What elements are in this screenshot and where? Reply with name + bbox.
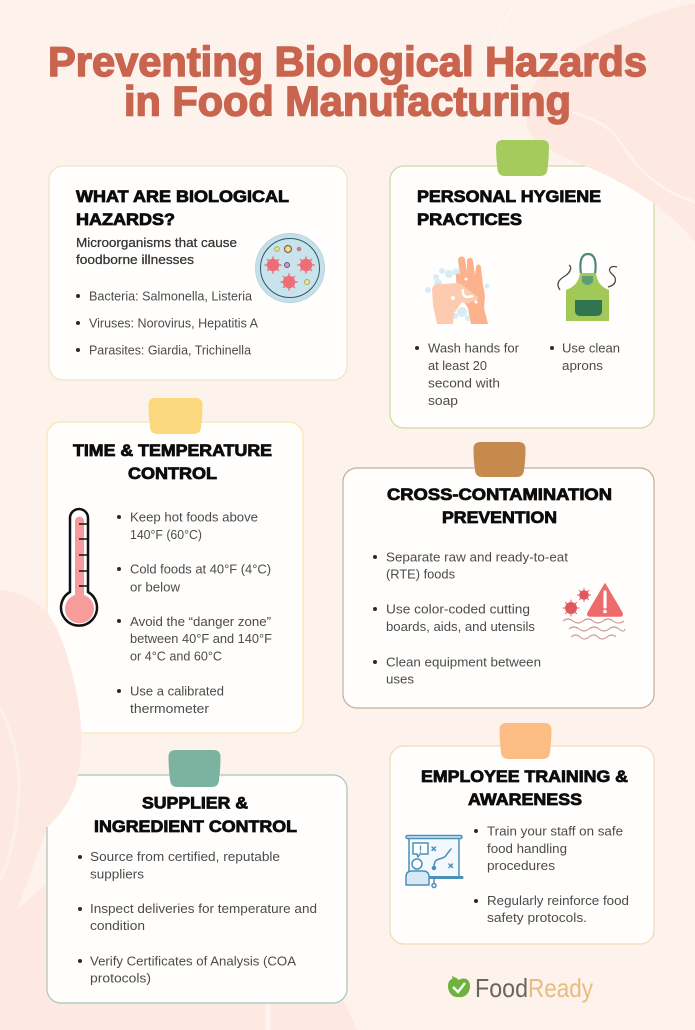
bullet list: Separate raw and ready-to-eat bbox=[386, 550, 568, 564]
bullet list: Inspect deliveries for temperature and bbox=[90, 901, 317, 916]
definition text: foodborne illnesses bbox=[76, 252, 195, 267]
panel: supplier and ingredient control bbox=[47, 750, 347, 1003]
heading: PRACTICES bbox=[417, 210, 522, 229]
panel: what are biological hazards bbox=[49, 166, 347, 380]
bullet list: uses bbox=[386, 672, 415, 686]
heading: CROSS-CONTAMINATION bbox=[387, 485, 612, 504]
bullet list: second with bbox=[428, 376, 500, 390]
heading bbox=[76, 187, 289, 229]
heading: SUPPLIER & bbox=[142, 794, 248, 812]
bullet list: Use a calibrated bbox=[130, 684, 224, 698]
bullet list: aprons bbox=[562, 358, 604, 373]
bullet list bbox=[117, 510, 272, 716]
heading: INGREDIENT CONTROL bbox=[94, 817, 297, 836]
bullet list: at least 20 bbox=[428, 358, 487, 373]
icon: apple check bbox=[448, 976, 470, 997]
bullet list: condition bbox=[90, 918, 145, 933]
heading bbox=[421, 767, 628, 809]
bullet list: Wash hands for bbox=[428, 340, 520, 356]
title: in Food Manufacturing bbox=[124, 78, 571, 124]
bullet list: 140°F (60°C) bbox=[130, 527, 202, 542]
bullet list: soap bbox=[428, 393, 458, 408]
bullet list: Bacteria: Salmonella, Listeria bbox=[89, 288, 253, 304]
panel: cross-contamination prevention bbox=[343, 442, 654, 708]
icon: washing hands bbox=[425, 256, 490, 324]
icon: training board bbox=[406, 836, 462, 888]
bullet list: Keep hot foods above bbox=[130, 510, 258, 524]
bullet list: food handling bbox=[487, 841, 567, 856]
title bbox=[48, 38, 647, 124]
definition text bbox=[76, 235, 237, 267]
bullet list: Parasites: Giardia, Trichinella bbox=[89, 342, 252, 358]
panel: time and temperature control bbox=[47, 398, 303, 733]
bullet list bbox=[373, 550, 568, 686]
heading: EMPLOYEE TRAINING & bbox=[421, 767, 628, 786]
bullet list: Viruses: Norovirus, Hepatitis A bbox=[89, 316, 258, 330]
logo: FoodReady bbox=[448, 973, 593, 1003]
bullet list: Regularly reinforce food bbox=[487, 893, 629, 908]
bullet list: procedures bbox=[487, 858, 556, 873]
panel: employee training and awareness bbox=[390, 723, 654, 944]
heading: PREVENTION bbox=[442, 508, 557, 527]
tab bbox=[474, 442, 526, 477]
bullet list: Use color-coded cutting bbox=[386, 602, 530, 616]
logo: FoodReady: Ready bbox=[528, 973, 593, 1003]
heading: AWARENESS bbox=[468, 790, 582, 809]
bullet list bbox=[415, 340, 620, 408]
bullet list: safety protocols. bbox=[487, 910, 587, 925]
tab bbox=[148, 398, 202, 434]
tab bbox=[168, 750, 220, 787]
bullet list: Avoid the “danger zone” bbox=[130, 614, 271, 629]
bullet list: Clean equipment between bbox=[386, 654, 541, 670]
heading: TIME & TEMPERATURE bbox=[73, 441, 272, 460]
heading bbox=[94, 794, 297, 836]
bullet list: or 4°C and 60°C bbox=[130, 648, 222, 664]
bullet list: or below bbox=[130, 580, 181, 594]
icon: petri dish bbox=[256, 234, 324, 302]
heading: WHAT ARE BIOLOGICAL bbox=[76, 187, 289, 206]
bullet list: Train your staff on safe bbox=[487, 824, 623, 838]
bullet list bbox=[78, 849, 317, 986]
tab bbox=[496, 140, 549, 176]
heading bbox=[417, 187, 601, 229]
icon: thermometer bbox=[61, 509, 97, 626]
icon: hazard warning bbox=[563, 584, 625, 639]
bullet list: Source from certified, reputable bbox=[90, 849, 280, 864]
bullet list: Cold foods at 40°F (4°C) bbox=[130, 562, 271, 576]
bullet list: (RTE) foods bbox=[386, 566, 455, 582]
bullet list: Use clean bbox=[562, 340, 620, 356]
bullet list bbox=[76, 288, 258, 358]
title: Preventing Biological Hazards bbox=[48, 38, 647, 85]
panel: personal hygiene practices bbox=[390, 140, 654, 428]
heading: CONTROL bbox=[128, 464, 217, 483]
definition text: Microorganisms that cause bbox=[76, 235, 237, 250]
bullet list: Verify Certificates of Analysis (COA bbox=[90, 954, 296, 968]
heading bbox=[387, 485, 612, 527]
bullet list: thermometer bbox=[130, 701, 210, 716]
bullet list: between 40°F and 140°F bbox=[130, 631, 272, 646]
bullet list: protocols) bbox=[90, 970, 151, 986]
heading: HAZARDS? bbox=[76, 210, 175, 229]
logo: FoodReady: Food bbox=[475, 973, 528, 1003]
bullet list: boards, aids, and utensils bbox=[386, 619, 535, 634]
heading bbox=[73, 441, 272, 483]
bullet list: suppliers bbox=[90, 866, 145, 882]
tab bbox=[500, 723, 552, 759]
heading: PERSONAL HYGIENE bbox=[417, 187, 601, 206]
icon: apron bbox=[558, 254, 617, 321]
bullet list bbox=[474, 824, 629, 925]
